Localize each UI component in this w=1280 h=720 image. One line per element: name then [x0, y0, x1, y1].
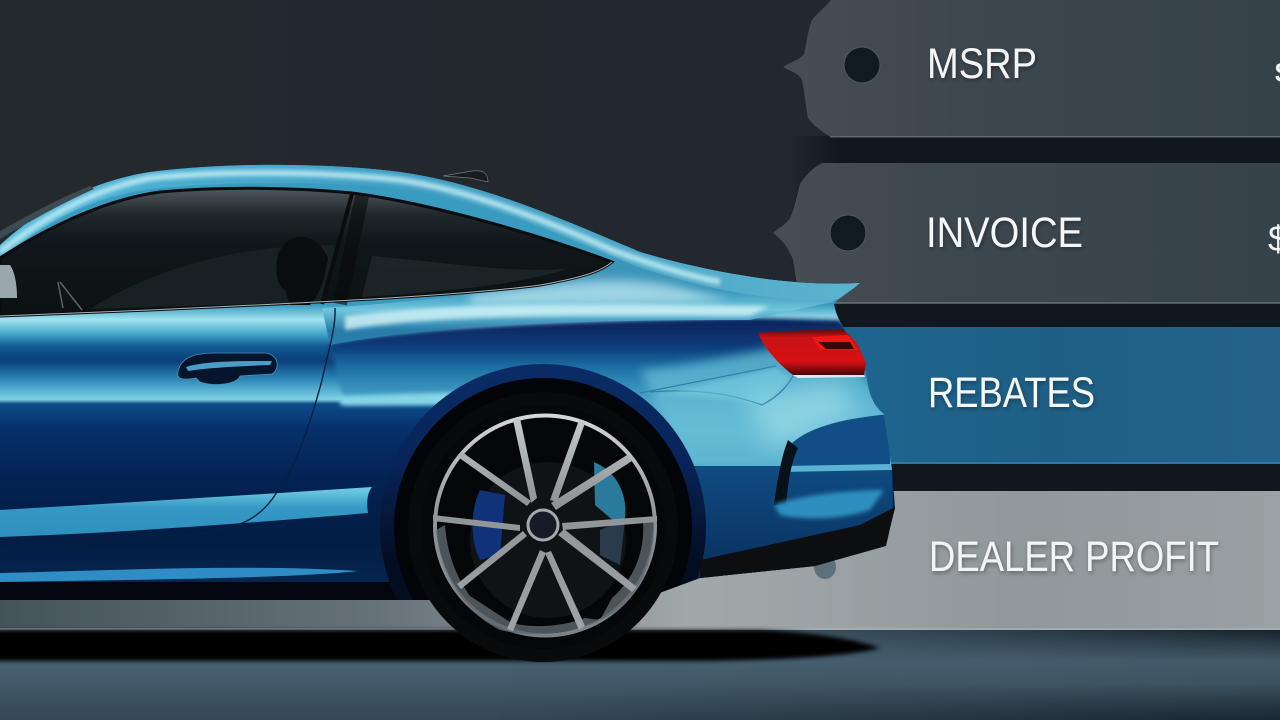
- side window: [0, 188, 612, 316]
- panel: INVOICE tag: [773, 163, 1280, 304]
- roof rail: [0, 172, 860, 289]
- door handle: [178, 353, 277, 384]
- windshield edge: [0, 186, 94, 242]
- panel: REBATES: [820, 327, 1280, 464]
- rim: [435, 416, 655, 636]
- antenna fin: [443, 171, 488, 182]
- lower sill highlight: [0, 568, 358, 582]
- rear bumper: [640, 507, 895, 590]
- DEALER PROFIT label: DEALER PROFIT: [929, 533, 1219, 581]
- REBATES label: REBATES: [928, 369, 1095, 417]
- calipers: [472, 490, 505, 560]
- spokes: [433, 418, 657, 631]
- panel: MSRP tag: [783, 0, 1280, 138]
- hub: [528, 510, 558, 540]
- door shut line: [0, 308, 335, 548]
- rear quarter panel: [330, 318, 900, 470]
- car body: [0, 164, 895, 600]
- sill shadow: [0, 582, 397, 600]
- headrest: [276, 237, 328, 305]
- wheel: [408, 392, 678, 662]
- taillight: [758, 329, 866, 378]
- INVOICE punch hole: [830, 215, 866, 251]
- fender line: [640, 366, 793, 405]
- B-pillar: [322, 194, 352, 304]
- skirt highlight: [0, 487, 372, 537]
- tyre: [408, 392, 678, 662]
- interior: [90, 245, 340, 309]
- INVOICE label: INVOICE: [926, 209, 1083, 257]
- panel: DEALER PROFIT: [0, 491, 1280, 630]
- bumper recess: [785, 414, 890, 466]
- exhaust: [814, 555, 836, 579]
- ground shadow: [0, 630, 880, 661]
- wheel arch: [380, 364, 706, 600]
- steering wheel: [58, 282, 82, 310]
- rear shoulder highlight: [322, 240, 860, 345]
- rear lower dark panel: [661, 466, 893, 592]
- mirror: [0, 265, 17, 298]
- MSRP label: MSRP: [927, 40, 1037, 88]
- divider gaps: [790, 136, 1280, 492]
- MSRP punch hole: [844, 47, 880, 83]
- brake disc: [470, 462, 626, 618]
- car: [0, 160, 905, 690]
- floor: [0, 630, 1280, 720]
